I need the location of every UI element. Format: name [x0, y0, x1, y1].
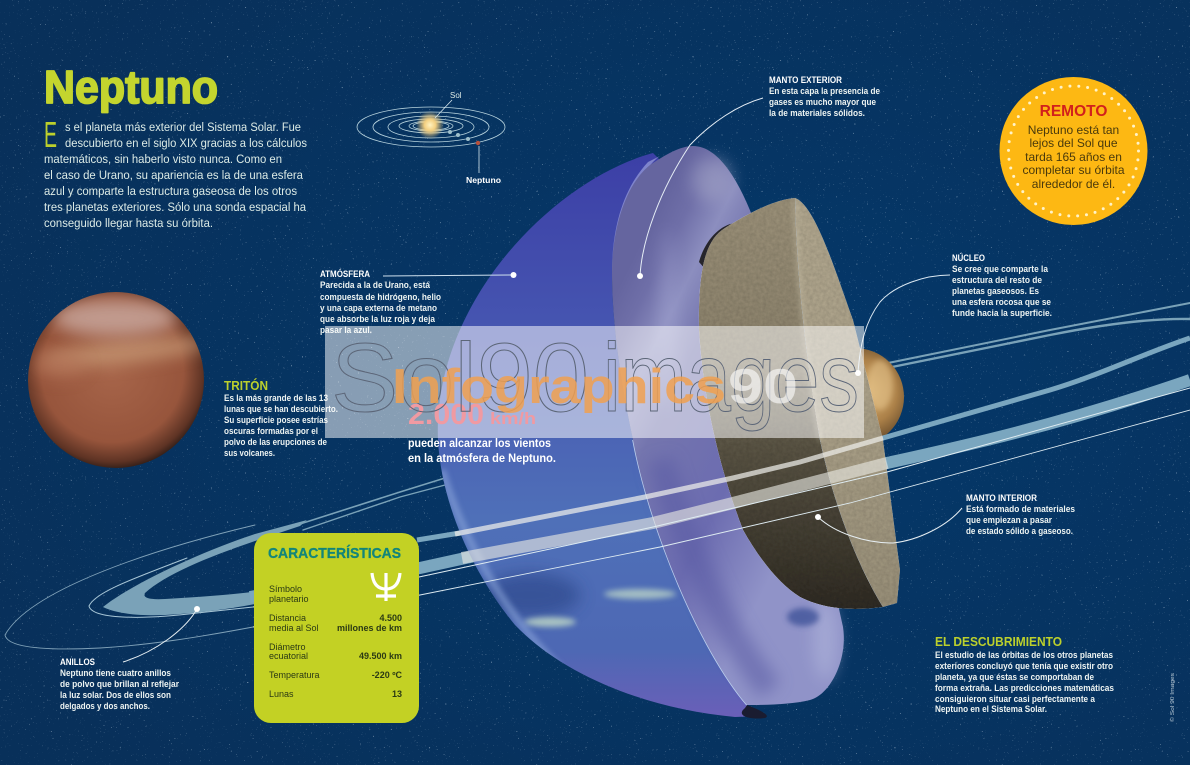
panel: el descubrimiento: exteriores concluyó que tenía que existir otro — [935, 661, 1114, 671]
panel: remoto: alrededor de él. — [1032, 177, 1115, 191]
callout: manto interior — [815, 493, 1075, 543]
callout: manto interior: Está formado de materiales — [966, 504, 1075, 514]
panel: remoto: lejos del Sol que — [1029, 136, 1118, 150]
intro text block: tres planetas exteriores. Sólo una sonda espacial ha — [44, 200, 306, 214]
panel: el descubrimiento: El estudio de las órbitas de los otros planetas — [935, 650, 1113, 660]
callout: atmosfera: ATMÓSFERA — [320, 268, 371, 279]
intro text block — [44, 114, 307, 230]
watermark: 90 — [728, 360, 798, 414]
panel: el descubrimiento: forma extraña. Las predicciones matemáticas — [935, 683, 1114, 693]
image credit: © Sol 90 Images — [1169, 673, 1176, 722]
Triton moon — [28, 292, 211, 468]
callout: manto interior: que empiezan a pasar — [966, 515, 1053, 525]
panel: caracteristicas: Diámetro — [269, 642, 306, 652]
watermark: images — [603, 323, 859, 432]
callout: atmosfera: y una capa externa de metano — [320, 303, 438, 313]
panel: caracteristicas: CARACTERÍSTICAS — [268, 545, 401, 562]
intro text block: el caso de Urano, su apariencia es la de una esfera — [44, 168, 303, 182]
callout: manto exterior: la de materiales sólidos. — [769, 108, 865, 118]
callout: nucleo: NÚCLEO — [952, 252, 985, 263]
panel: el descubrimiento — [935, 634, 1114, 714]
Neptune: atmosphere layer — [438, 153, 760, 717]
Triton text: lunas que se han descubierto. — [224, 404, 338, 414]
callout: atmosfera: que absorbe la luz roja y deja — [320, 314, 435, 324]
panel: caracteristicas: Lunas — [269, 689, 294, 699]
wind speed callout — [408, 399, 556, 465]
Triton text: Es la más grande de las 13 — [224, 393, 328, 403]
callout: nucleo: estructura del resto de — [952, 275, 1042, 285]
panel: caracteristicas: 13 — [392, 689, 402, 699]
solar system orbit diagram: Sol — [450, 91, 462, 100]
panel: el descubrimiento: planeta, ya que éstas se comportaban de — [935, 672, 1094, 682]
panel: caracteristicas: -220 ºC — [372, 670, 402, 680]
panel: caracteristicas: media al Sol — [269, 623, 319, 633]
intro text block: E — [44, 114, 57, 155]
callout: anillos: ANILLOS — [60, 657, 95, 667]
solar system orbit diagram — [357, 91, 505, 185]
Triton text — [224, 378, 338, 458]
panel: remoto: tarda 165 años en — [1025, 150, 1122, 164]
callout: anillos: Neptuno tiene cuatro anillos — [60, 668, 171, 678]
wind speed callout: pueden alcanzar los vientos — [408, 438, 551, 450]
rings passing in front of Neptune — [253, 388, 1190, 627]
panel: caracteristicas — [254, 533, 419, 723]
rings in open space — [250, 338, 1190, 597]
watermark — [325, 323, 864, 438]
callout: manto exterior — [637, 75, 880, 279]
watermark: Infographics — [392, 360, 726, 414]
callout: nucleo — [855, 252, 1052, 376]
wind speed callout: 2.000 — [408, 399, 484, 431]
callout: anillos: delgados y dos anchos. — [60, 701, 150, 711]
Triton text: sus volcanes. — [224, 448, 275, 458]
icon: Neptune trident symbol — [372, 573, 400, 601]
callout: atmosfera — [320, 268, 516, 335]
wind speed callout: km/h — [490, 409, 536, 428]
callout: manto interior: MANTO INTERIOR — [966, 493, 1038, 503]
panel: el descubrimiento: Neptuno en el Sistema Solar. — [935, 704, 1047, 714]
watermark: Sol90 — [331, 323, 589, 432]
Triton text: Su superficie posee estrías — [224, 415, 328, 425]
callout: manto exterior: MANTO EXTERIOR — [769, 75, 843, 85]
Neptune: outer mantle layer — [612, 146, 844, 719]
callout: atmosfera: compuesta de hidrógeno, helio — [320, 292, 442, 302]
Nucleus sphere — [806, 348, 904, 446]
panel: caracteristicas: ecuatorial — [269, 651, 308, 661]
panel: remoto: completar su órbita — [1022, 163, 1125, 177]
callout: nucleo: planetas gaseosos. Es — [952, 286, 1039, 296]
panel: remoto: Neptuno está tan — [1028, 123, 1119, 137]
Triton text: TRITÓN — [224, 378, 268, 393]
wind speed callout: en la atmósfera de Neptuno. — [408, 453, 556, 465]
intro text block: conseguido llegar hasta su órbita. — [44, 216, 213, 230]
callout: nucleo: Se cree que comparte la — [952, 264, 1048, 274]
panel: remoto — [1000, 77, 1148, 225]
intro text block: matemáticos, sin haberlo visto nunca. Como en — [44, 152, 282, 166]
panel: caracteristicas: millones de km — [337, 623, 402, 633]
callout: manto exterior: En esta capa la presencia de — [769, 86, 880, 96]
callout: atmosfera: Parecida a la de Urano, está — [320, 280, 430, 290]
panel: remoto: REMOTO — [1040, 103, 1107, 120]
panel: el descubrimiento: consiguieron situar casi perfectamente a — [935, 694, 1095, 704]
callout: manto exterior: gases es mucho mayor que — [769, 97, 876, 107]
intro text block: s el planeta más exterior del Sistema Solar. Fue — [65, 120, 301, 134]
callout: atmosfera: pasar la azul. — [320, 325, 372, 335]
callout: anillos: de polvo que brillan al reflejar — [60, 679, 180, 689]
panel: caracteristicas: planetario — [269, 594, 309, 604]
callout: manto interior: de estado sólido a gaseoso. — [966, 526, 1073, 536]
Triton text: polvo de las erupciones de — [224, 437, 327, 447]
intro text block: descubierto en el siglo XIX gracias a los cálculos — [65, 136, 307, 150]
intro text block: azul y comparte la estructura gaseosa de los otros — [44, 184, 297, 198]
panel: caracteristicas: Distancia — [269, 613, 306, 623]
panel: caracteristicas: 49.500 km — [359, 651, 402, 661]
Neptune: inner mantle of rock — [699, 198, 900, 609]
callout: anillos — [60, 606, 200, 711]
callout: nucleo: funde hacia la superficie. — [952, 308, 1052, 318]
panel: el descubrimiento: EL DESCUBRIMIENTO — [935, 634, 1062, 649]
panel: caracteristicas: 4.500 — [379, 613, 402, 623]
panel: caracteristicas: Temperatura — [269, 670, 320, 680]
solar system orbit diagram: Neptuno — [466, 175, 501, 185]
panel: caracteristicas: Símbolo — [269, 584, 302, 594]
title: Neptuno — [44, 61, 218, 113]
callout: anillos: la luz solar. Dos de ellos son — [60, 690, 171, 700]
back part of the rings — [5, 303, 1190, 649]
Triton text: oscuras formadas por el — [224, 426, 318, 436]
callout: nucleo: una esfera rocosa que se — [952, 297, 1051, 307]
